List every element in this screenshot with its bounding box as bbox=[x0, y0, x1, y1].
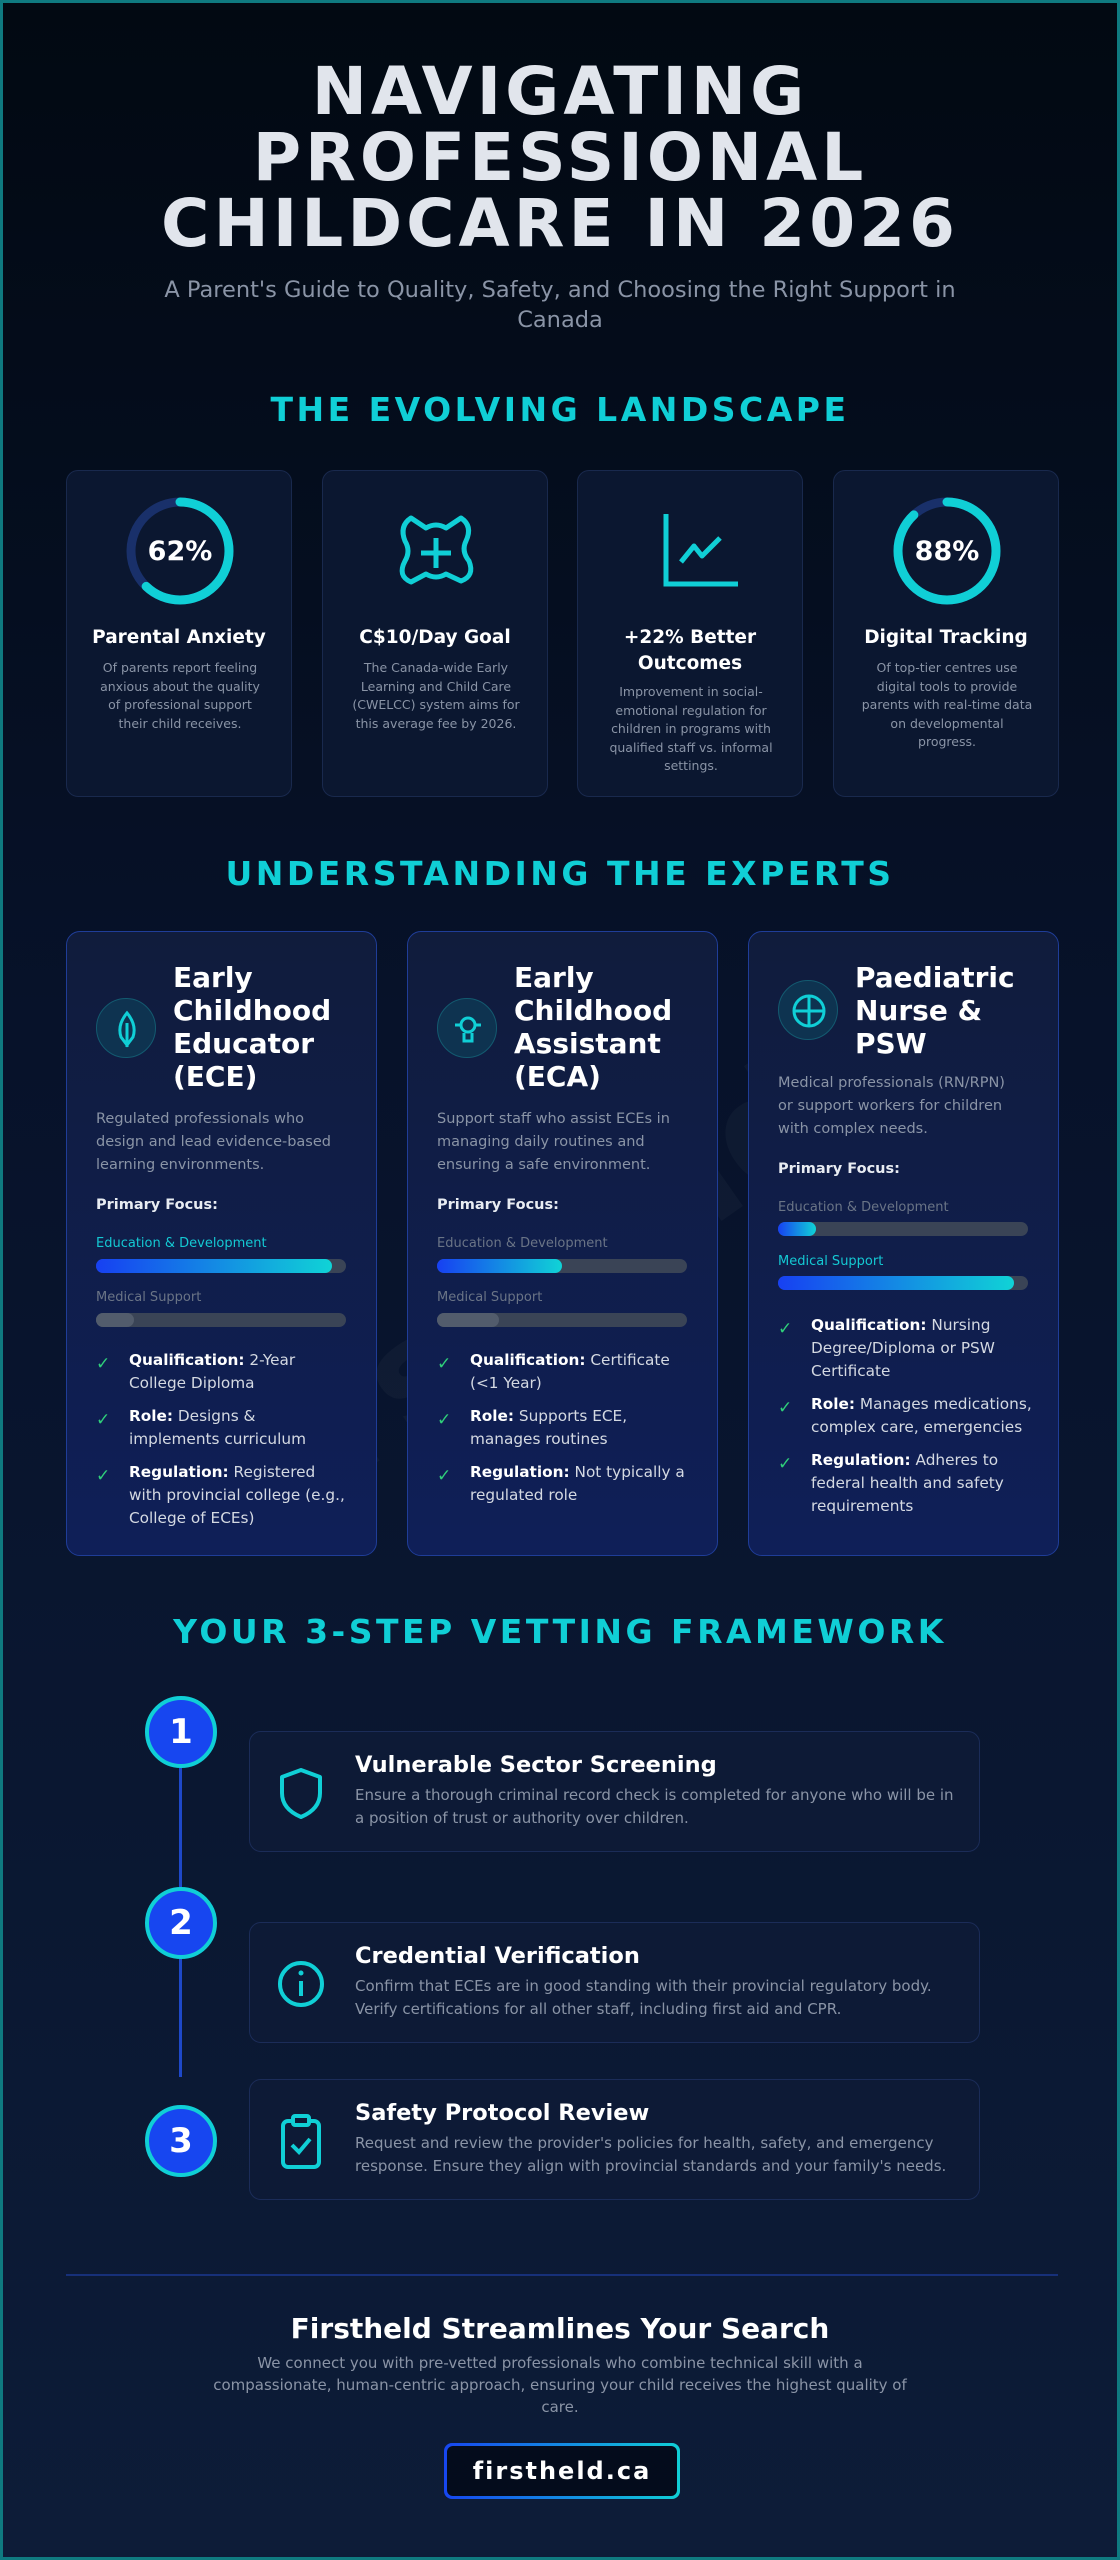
expert card: nurse: Qualification: Nursing Degree/Diploma or PSW Certificate bbox=[811, 1316, 995, 1380]
heading: vetting framework: YOUR 3-STEP VETTING FRAMEWORK bbox=[173, 1612, 947, 1651]
icon: shield bbox=[280, 1768, 322, 1819]
expert card: ECA: Role: Supports ECE, manages routines bbox=[470, 1407, 627, 1448]
step 1: screening: Vulnerable Sector Screening bbox=[355, 1752, 717, 1778]
expert card: ECA bbox=[407, 931, 718, 1556]
stat card: better outcomes: Improvement in social-emotional regulation for children in programs with qualified staff vs. informal settings. bbox=[609, 684, 773, 773]
icon: seedling bbox=[96, 998, 156, 1058]
heading: understanding the experts: UNDERSTANDING THE EXPERTS bbox=[225, 854, 895, 893]
stat card: C$10/day: C$10/Day Goal bbox=[359, 627, 511, 648]
expert card: nurse: PSW bbox=[855, 1027, 927, 1060]
button bbox=[444, 2443, 680, 2499]
step number 3 bbox=[145, 2105, 217, 2177]
expert card: ECA: Support staff who assist ECEs in managing daily routines and ensuring a safe environment. bbox=[437, 1111, 670, 1173]
stat card: parental anxiety bbox=[66, 470, 292, 797]
expert card: ECA: Education & Development bbox=[437, 1236, 608, 1251]
stat card: digital tracking bbox=[833, 470, 1059, 797]
expert card: ECA: Assistant bbox=[514, 1027, 661, 1060]
timeline line bbox=[179, 1763, 182, 2077]
step 2: credentials: Credential Verification bbox=[355, 1943, 640, 1969]
expert card: ECA: Medical Support bbox=[437, 1290, 542, 1305]
step 2: credentials: Confirm that ECEs are in good standing with their provincial regulatory body. Verify certifications for all other staff, including first aid and CPR. bbox=[355, 1977, 932, 2018]
step 1: screening bbox=[249, 1731, 980, 1852]
step number 2 bbox=[145, 1887, 217, 1959]
step 3: safety protocol: Safety Protocol Review bbox=[355, 2100, 649, 2126]
expert card: nurse: Regulation: Adheres to federal health and safety requirements bbox=[811, 1451, 1004, 1515]
expert card: nurse: Role: Manages medications, complex care, emergencies bbox=[811, 1395, 1032, 1436]
stat card: digital tracking: Of top-tier centres use digital tools to provide parents with real-time data on developmental progress. bbox=[862, 660, 1032, 749]
step number 3: 3 bbox=[169, 2121, 193, 2161]
expert card: nurse: Medical Support bbox=[778, 1254, 883, 1269]
stat card: parental anxiety: Parental Anxiety bbox=[92, 627, 266, 648]
heading: the evolving landscape: THE EVOLVING LANDSCAPE bbox=[270, 390, 850, 429]
stat card: C$10/day bbox=[322, 470, 548, 797]
stat card: digital tracking: Digital Tracking bbox=[864, 627, 1028, 648]
step number 1 bbox=[145, 1696, 217, 1768]
icon: ring 88%: 88% bbox=[915, 536, 979, 567]
expert card: ECE: Regulated professionals who design and lead evidence-based learning environments. bbox=[96, 1111, 331, 1173]
step 3: safety protocol: Request and review the provider's policies for health, safety, and emergency response. Ensure they align with provincial standards and your family's needs. bbox=[355, 2134, 946, 2175]
expert card: ECA: Regulation: Not typically a regulated role bbox=[470, 1463, 685, 1504]
expert card: nurse: Medical professionals (RN/RPN) or support workers for children with complex needs. bbox=[778, 1075, 1005, 1137]
title: NAVIGATING bbox=[312, 53, 808, 130]
icon: ring 88% bbox=[894, 498, 1000, 604]
icon: medical cross circle bbox=[778, 980, 838, 1040]
expert card: ECE: Childhood bbox=[173, 994, 331, 1027]
title bbox=[161, 53, 959, 262]
expert card: ECE: Qualification: 2-Year College Diploma bbox=[129, 1351, 295, 1392]
expert card: ECE: Primary Focus: bbox=[96, 1197, 218, 1213]
subtitle: A Parent's Guide to Quality, Safety, and Choosing the Right Support in Canada bbox=[164, 277, 956, 333]
icon: ring 62%: 62% bbox=[148, 536, 212, 567]
title: CHILDCARE IN 2026 bbox=[161, 185, 959, 262]
watermark: firstheld bbox=[178, 1024, 862, 1576]
step number 1: 1 bbox=[169, 1712, 193, 1752]
expert card: ECE: Role: Designs & implements curriculum bbox=[129, 1407, 306, 1448]
step 2: credentials bbox=[249, 1922, 980, 2043]
stat card: C$10/day: The Canada-wide Early Learning and Child Care (CWELCC) system aims for this average fee by 2026. bbox=[352, 660, 520, 730]
expert card: nurse: Primary Focus: bbox=[778, 1161, 900, 1177]
title: PROFESSIONAL bbox=[253, 119, 867, 196]
icon: chart bbox=[664, 514, 738, 586]
step number 2: 2 bbox=[169, 1903, 193, 1943]
expert card: ECA: (ECA) bbox=[514, 1060, 601, 1093]
icon: helper bbox=[437, 998, 497, 1058]
stat card: better outcomes: +22% Better bbox=[624, 627, 756, 648]
expert card: ECE: Regulation: Registered with provincial college (e.g., College of ECEs) bbox=[129, 1463, 345, 1527]
expert card: nurse bbox=[748, 931, 1059, 1556]
expert card: nurse: Paediatric bbox=[855, 961, 1015, 994]
step 1: screening: Ensure a thorough criminal record check is completed for anyone who will be in a position of trust or authority over children. bbox=[355, 1786, 954, 1827]
expert card: ECE: Education & Development bbox=[96, 1236, 267, 1251]
expert card: ECE: Early bbox=[173, 961, 253, 994]
divider bbox=[66, 2274, 1058, 2276]
stat card: better outcomes: Outcomes bbox=[638, 653, 742, 674]
footer heading: Firstheld Streamlines Your Search bbox=[291, 2312, 829, 2345]
expert card: ECA: Early bbox=[514, 961, 594, 994]
expert card: nurse: Nurse & bbox=[855, 994, 982, 1027]
expert card: ECA: Qualification: Certificate (<1 Year) bbox=[470, 1351, 670, 1392]
icon: cross shape bbox=[400, 516, 474, 584]
stat card: parental anxiety: Of parents report feeling anxious about the quality of professional support their child receives. bbox=[100, 660, 260, 730]
expert card: ECE: Educator bbox=[173, 1027, 314, 1060]
icon: clipboard bbox=[281, 2114, 321, 2169]
icon: info bbox=[278, 1961, 324, 2007]
expert card: ECE: Medical Support bbox=[96, 1290, 201, 1305]
icon: ring 62% bbox=[126, 498, 234, 604]
expert card: ECA: Primary Focus: bbox=[437, 1197, 559, 1213]
step 3: safety protocol bbox=[249, 2079, 980, 2200]
expert card: nurse: Education & Development bbox=[778, 1200, 949, 1215]
expert card: ECE: (ECE) bbox=[173, 1060, 257, 1093]
expert card: ECA: Childhood bbox=[514, 994, 672, 1027]
expert card: ECE bbox=[66, 931, 377, 1556]
footer text: We connect you with pre-vetted professionals who combine technical skill with a compassionate, human-centric approach, ensuring your child receives the highest quality of care. bbox=[213, 2354, 907, 2416]
stat card: better outcomes bbox=[577, 470, 803, 797]
button: firstheld.ca bbox=[473, 2457, 651, 2485]
